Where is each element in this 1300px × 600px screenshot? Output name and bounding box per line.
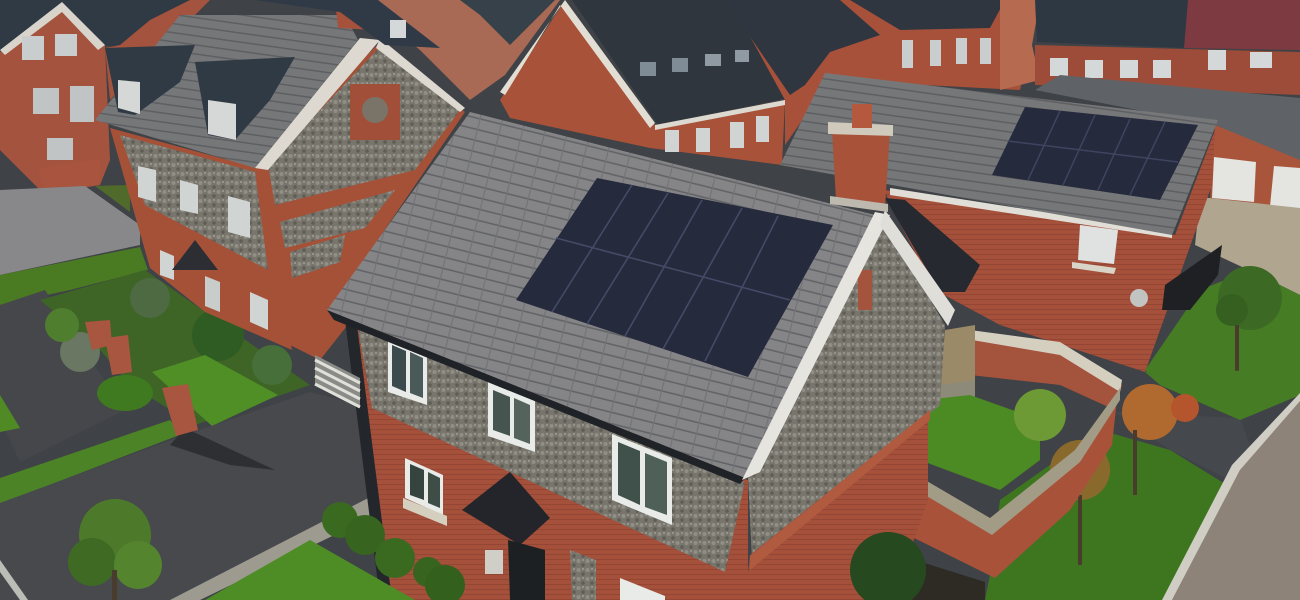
lawn bottom left	[0, 420, 182, 504]
garage right	[1035, 75, 1300, 210]
bottom left tree	[68, 499, 162, 600]
right house walls	[885, 130, 1222, 372]
left house walls	[110, 42, 465, 360]
main house roof	[327, 112, 955, 484]
grass small left	[0, 395, 20, 432]
tree right	[1216, 266, 1282, 380]
front hedge and lawn	[205, 502, 465, 600]
dark ground	[870, 560, 985, 600]
autumn trees	[1014, 384, 1199, 565]
chimney	[828, 104, 893, 212]
white gate	[315, 355, 360, 408]
porch	[462, 472, 550, 600]
top centre-right houses	[725, 0, 1040, 145]
ground floor windows	[403, 458, 665, 600]
right path and lawn	[925, 370, 1300, 600]
front garden of left house	[40, 270, 310, 426]
brick pillars left	[85, 320, 198, 436]
driveway right	[1195, 197, 1300, 295]
main solar panel	[516, 178, 833, 377]
first floor windows	[388, 338, 672, 525]
road left	[0, 290, 125, 462]
main house front wall	[345, 320, 748, 600]
top right terrace	[1035, 0, 1300, 95]
lawn right	[1145, 270, 1300, 420]
lawn strip left	[0, 247, 148, 305]
top left house	[0, 0, 210, 194]
right house roof	[780, 73, 1218, 235]
road bottom	[0, 392, 382, 600]
dark side roof behind main house	[885, 198, 980, 292]
top centre house	[500, 0, 788, 165]
dormer right	[195, 57, 295, 140]
driveway top left	[0, 185, 140, 275]
solar panel right house	[992, 107, 1198, 200]
garden wall front	[908, 388, 1120, 578]
dormer left	[105, 45, 195, 115]
curved garden wall	[940, 325, 1122, 410]
main house gable wall	[745, 222, 945, 600]
left house roof	[95, 0, 465, 170]
shrub by gable	[850, 532, 926, 600]
patio by curved wall	[925, 378, 975, 420]
top centre-left background houses	[255, 0, 560, 100]
